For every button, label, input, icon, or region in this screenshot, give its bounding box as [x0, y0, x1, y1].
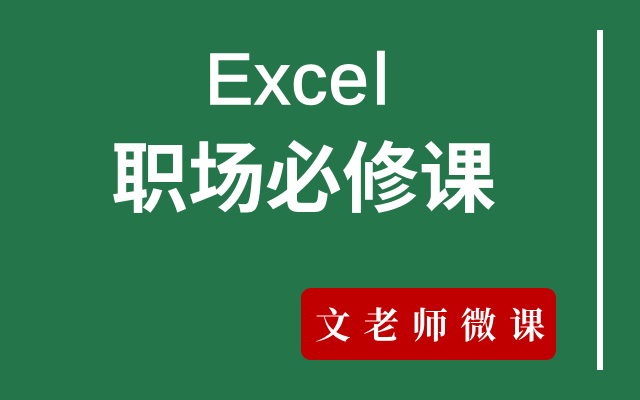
badge text: 文老师微课	[315, 298, 558, 349]
badge: 文老师微课	[301, 288, 556, 360]
heading: 职场必修课: 职场必修课	[111, 118, 496, 229]
title: Excel: Excel	[205, 40, 390, 120]
vertical divider line	[597, 30, 603, 370]
